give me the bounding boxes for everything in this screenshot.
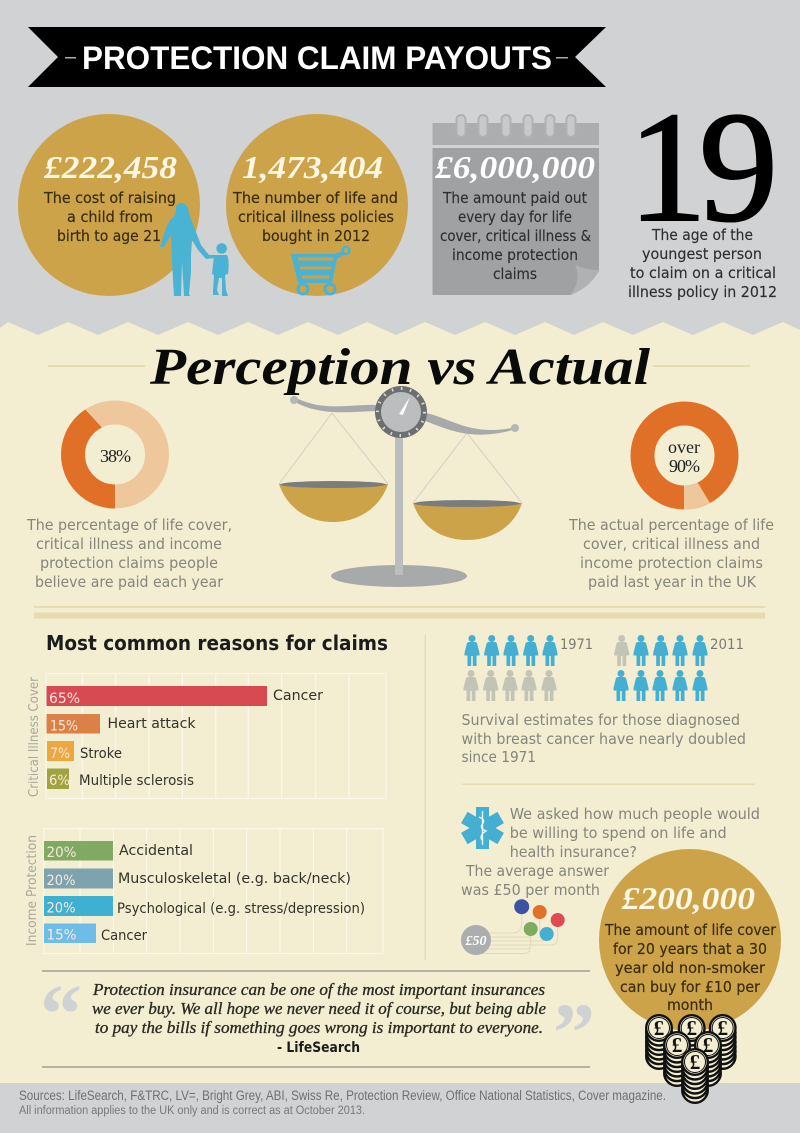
stat: age 19: youngest person [642, 245, 762, 263]
text: insurance question: We asked how much people would [510, 805, 760, 823]
chart: income protection: 20% [46, 845, 76, 861]
stat: £200,000 life cover: month [667, 996, 713, 1014]
chart: critical illness cover: Multiple sclerosis [79, 773, 194, 789]
text: actual description: The actual percentage of life [568, 516, 774, 534]
title banner [28, 27, 606, 87]
donut: perception 38%: 38% [100, 446, 131, 466]
text: survival estimates [462, 711, 746, 766]
title banner: PROTECTION CLAIM PAYOUTS [82, 40, 552, 76]
text: insurance question [461, 805, 760, 899]
icon: coin stacks: £ [686, 1016, 697, 1040]
chart: critical illness cover [26, 673, 386, 799]
text: perception description: protection claims people [40, 554, 218, 572]
chart: critical illness cover: 7% [50, 746, 70, 762]
stat: calendar £6,000,000 [432, 115, 600, 296]
chart: critical illness cover: 6% [49, 773, 70, 789]
quote: LifeSearch: ” [553, 987, 595, 1080]
icon: coin stacks: £ [717, 1016, 728, 1040]
text: actual description: cover, critical illness and [583, 535, 760, 553]
icon: star of life [461, 807, 504, 849]
stat: age 19: 19 [628, 80, 778, 255]
quote: LifeSearch: to pay the bills if something goes wrong is important to everyone. [95, 1018, 543, 1037]
stat: calendar £6,000,000: income protection [452, 246, 578, 264]
diagram: £50 network [461, 899, 565, 955]
donut: actual over 90% [642, 414, 726, 510]
background: cream zigzag panel [0, 322, 800, 1083]
chart: critical illness cover: Stroke [80, 746, 122, 762]
icon: coin stacks: £ [672, 1033, 682, 1057]
text: insurance question: health insurance? [510, 843, 637, 861]
icon: coin stacks: £ [654, 1016, 664, 1040]
stat: policies bought [226, 114, 408, 296]
text: survival estimates: with breast cancer have nearly doubled [462, 730, 746, 748]
icon: weighing scales [279, 386, 522, 587]
icon: parent and child [160, 203, 229, 296]
stat: £200,000 life cover: £200,000 [621, 880, 755, 916]
chart: critical illness cover: 65% [49, 691, 80, 707]
text: insurance question: was £50 per month [461, 881, 600, 899]
axis label: critical illness cover: Critical Illness Cover [26, 677, 42, 797]
chart: critical illness cover: Cancer [273, 688, 323, 704]
chart: income protection: 15% [46, 928, 76, 944]
background: grey header [0, 0, 800, 340]
stat: cost of raising a child [18, 114, 200, 296]
text: survival estimates: Survival estimates for those diagnosed [462, 711, 740, 729]
text: perception description: critical illness and income [36, 535, 222, 553]
icon: shopping cart [291, 247, 350, 294]
stat: calendar £6,000,000: £6,000,000 [434, 149, 595, 185]
stat: £200,000 life cover: The amount of life cover [604, 921, 777, 939]
chart: income protection: Cancer [101, 928, 147, 944]
quote: LifeSearch: Protection insurance can be one of the most important insurances [92, 980, 545, 999]
chart: income protection [24, 828, 383, 954]
donut: actual over 90%: over [668, 437, 700, 457]
footer: sources band: Sources: LifeSearch, F&TRC, LV=, Bright Grey, ABI, Swiss Re, Protection Review, Office National Statistics, Cover magazine. [19, 1088, 666, 1103]
text: insurance question: be willing to spend on life and [510, 824, 727, 842]
chart: critical illness cover: 15% [50, 718, 78, 734]
stat: age 19: to claim on a critical [630, 264, 776, 282]
stat: age 19: The age of the [651, 226, 753, 244]
icon: coin stacks [646, 1015, 736, 1103]
stat: cost of raising a child: a child from [67, 208, 153, 226]
stat: £200,000 life cover [599, 849, 781, 1031]
stat: £200,000 life cover: year old non-smoker [615, 959, 766, 977]
axis label: income protection: Income Protection [24, 835, 40, 946]
stat: calendar £6,000,000: cover, critical illness & [440, 227, 591, 245]
stat: cost of raising a child: birth to age 21 [57, 227, 161, 245]
quote: LifeSearch [40, 968, 595, 1080]
stat: £200,000 life cover: can buy for £10 per [620, 978, 761, 996]
text: perception description: believe are paid each year [35, 573, 224, 591]
stat: age 19: illness policy in 2012 [628, 283, 777, 301]
chart: income protection: Accidental [119, 843, 193, 859]
quote: LifeSearch: - LifeSearch [277, 1040, 360, 1056]
heading: perception vs actual: Perception vs Actual [149, 339, 651, 396]
chart: income protection: 20% [46, 900, 76, 916]
pictogram: 1971 survival [464, 635, 593, 701]
text: actual description: paid last year in the UK [588, 573, 757, 591]
footer: sources band: All information applies to the UK only and is correct as at October 2013. [19, 1105, 365, 1117]
heading: most common reasons: Most common reasons for claims [46, 631, 388, 655]
chart: income protection: 20% [46, 873, 76, 889]
text: perception description: The percentage of life cover, [26, 516, 232, 534]
text: actual description [568, 516, 774, 591]
pictogram: 2011 survival: 2011 [710, 637, 744, 653]
stat: calendar £6,000,000: claims [493, 265, 537, 283]
stat: cost of raising a child: The cost of raising [43, 189, 176, 207]
pictogram: 1971 survival: 1971 [560, 637, 593, 653]
text: survival estimates: since 1971 [462, 748, 536, 766]
text: actual description: income protection claims [580, 554, 763, 572]
footer: sources band [0, 1083, 800, 1133]
icon: coin stacks: £ [690, 1050, 700, 1074]
stat: calendar £6,000,000: every day for life [458, 208, 572, 226]
donut: perception 38% [61, 410, 157, 508]
diagram: £50 network: £50 [464, 934, 486, 949]
text: insurance question: The average answer [465, 862, 610, 880]
donut: actual over 90%: 90% [669, 456, 700, 476]
stat: policies bought: 1,473,404 [242, 149, 383, 185]
quote: LifeSearch: “ [40, 968, 82, 1061]
chart: income protection: Musculoskeletal (e.g. back/neck) [118, 871, 351, 887]
pictogram: 2011 survival [614, 635, 744, 701]
text: perception description [26, 516, 232, 591]
stat: policies bought: critical illness policies [238, 208, 394, 226]
icon: coin stacks: £ [703, 1033, 713, 1057]
stat: £200,000 life cover: for 20 years that a 30 [613, 940, 767, 958]
stat: policies bought: The number of life and [232, 189, 398, 207]
chart: critical illness cover: Heart attack [108, 716, 196, 732]
stat: calendar £6,000,000: The amount paid out [442, 189, 587, 207]
chart: income protection: Psychological (e.g. stress/depression) [117, 901, 365, 917]
stat: cost of raising a child: £222,458 [43, 149, 177, 185]
quote: LifeSearch: we ever buy. We all hope we never need it of course, but being able [92, 999, 546, 1018]
stat: policies bought: bought in 2012 [262, 227, 370, 245]
